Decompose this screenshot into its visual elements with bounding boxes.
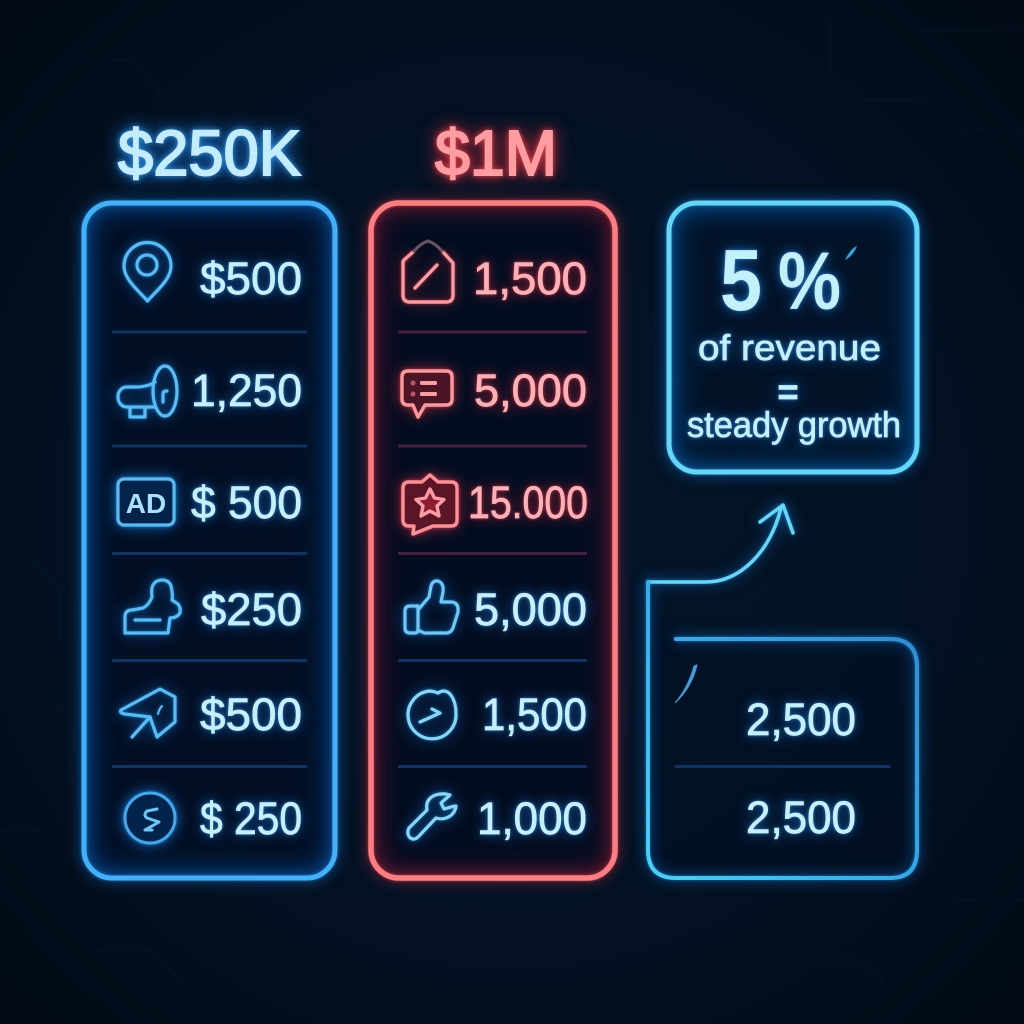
panel: $1M budget column xyxy=(371,203,615,878)
caption: steady growth: steady growth xyxy=(687,404,901,445)
row value: $ 500 xyxy=(191,477,302,528)
icon: price tag house xyxy=(403,252,453,302)
icon: stopwatch xyxy=(408,691,456,739)
caption: equals sign: = xyxy=(777,371,799,412)
row value: 2,500 xyxy=(746,694,856,745)
arrow: growth curve xyxy=(648,505,793,582)
icon: thumbs up xyxy=(405,581,458,633)
heading: $250K: $250K xyxy=(118,117,301,189)
heading: $1M: $1M xyxy=(435,117,557,189)
row value: 1,500 xyxy=(482,689,587,740)
row value: 1,500 xyxy=(473,253,587,304)
big percentage: % xyxy=(778,236,841,327)
icon: paper plane xyxy=(120,689,175,737)
panel: bottom budget box xyxy=(648,582,917,878)
row value: 15.000 xyxy=(468,477,588,528)
row value: $250 xyxy=(201,584,302,635)
panel: $250K budget column xyxy=(84,203,335,878)
icon: star review bubble xyxy=(403,475,457,534)
icon: AD badge: AD xyxy=(126,488,166,519)
row value: $500 xyxy=(200,253,302,304)
big percentage: 5 xyxy=(720,232,762,329)
accent fleck xyxy=(675,665,697,703)
icon: AD badge xyxy=(118,479,174,525)
icon: coin with bolt xyxy=(125,793,175,843)
caption: of revenue: of revenue xyxy=(698,327,881,368)
row value: $500 xyxy=(200,689,302,740)
panel: 5% of revenue callout xyxy=(669,203,917,472)
icon: chat bubble list xyxy=(402,371,452,417)
row value: $ 250 xyxy=(200,793,302,844)
row value: 5,000 xyxy=(474,365,587,416)
icon: location pin xyxy=(124,242,171,301)
accent fleck xyxy=(845,246,857,260)
icon: tag top arc xyxy=(413,241,443,252)
icon: person on a box xyxy=(125,580,180,633)
icon: wrench xyxy=(408,794,456,839)
row value: 1,000 xyxy=(477,793,587,844)
row value: 1,250 xyxy=(191,365,302,416)
row value: 5,000 xyxy=(474,584,587,635)
icon: megaphone xyxy=(118,366,177,417)
row value: 2,500 xyxy=(746,792,856,843)
big percentage xyxy=(720,232,841,329)
